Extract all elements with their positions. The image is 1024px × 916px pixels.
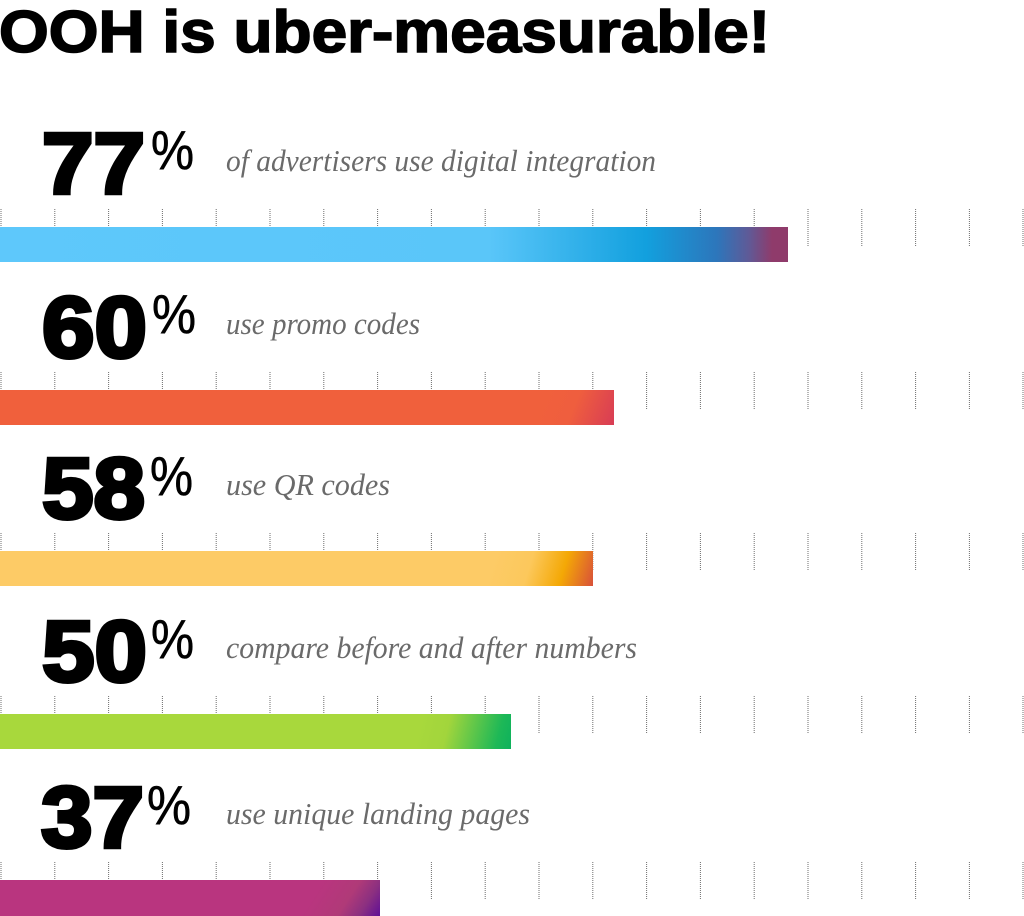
- number: 77%: %: [151, 119, 194, 181]
- row: 37% use unique landing pages: [0, 770, 1023, 916]
- title: OOH is uber-measurable!: [0, 0, 770, 65]
- number: 50%: [42, 604, 194, 700]
- number: 50%: 50: [42, 604, 147, 700]
- caption: before and after: compare before and after numbers: [226, 630, 637, 665]
- bar: 50%: [0, 714, 511, 749]
- row: 60% use promo codes: [0, 280, 1023, 425]
- bar: 60%: [0, 390, 614, 425]
- number: 58%: [42, 441, 193, 537]
- number: 77%: 77: [42, 116, 145, 212]
- number: 77%: [42, 116, 194, 212]
- row: 77% of advertisers use digital integration: [0, 116, 1023, 262]
- caption: QR codes: use QR codes: [226, 467, 390, 502]
- row: 50% compare before and after numbers: [0, 604, 1023, 749]
- number: 37%: [41, 770, 191, 866]
- caption: promo codes: use promo codes: [226, 306, 420, 341]
- number: 50%: %: [151, 608, 194, 670]
- bar: 58%: [0, 551, 593, 586]
- bar: 77%: [0, 227, 788, 262]
- number: 37%: 37: [41, 770, 144, 866]
- caption: advertisers: of advertisers use digital integration: [226, 143, 656, 178]
- number: 60%: %: [152, 283, 196, 345]
- number: 58%: %: [150, 445, 193, 507]
- number: 58%: 58: [42, 441, 145, 537]
- caption: landing pages: use unique landing pages: [226, 796, 530, 831]
- number: 60%: 60: [42, 280, 147, 376]
- number: 37%: %: [147, 774, 191, 836]
- bar: 37%: [0, 880, 380, 916]
- row: 58% use QR codes: [0, 441, 1023, 586]
- number: 60%: [42, 280, 196, 376]
